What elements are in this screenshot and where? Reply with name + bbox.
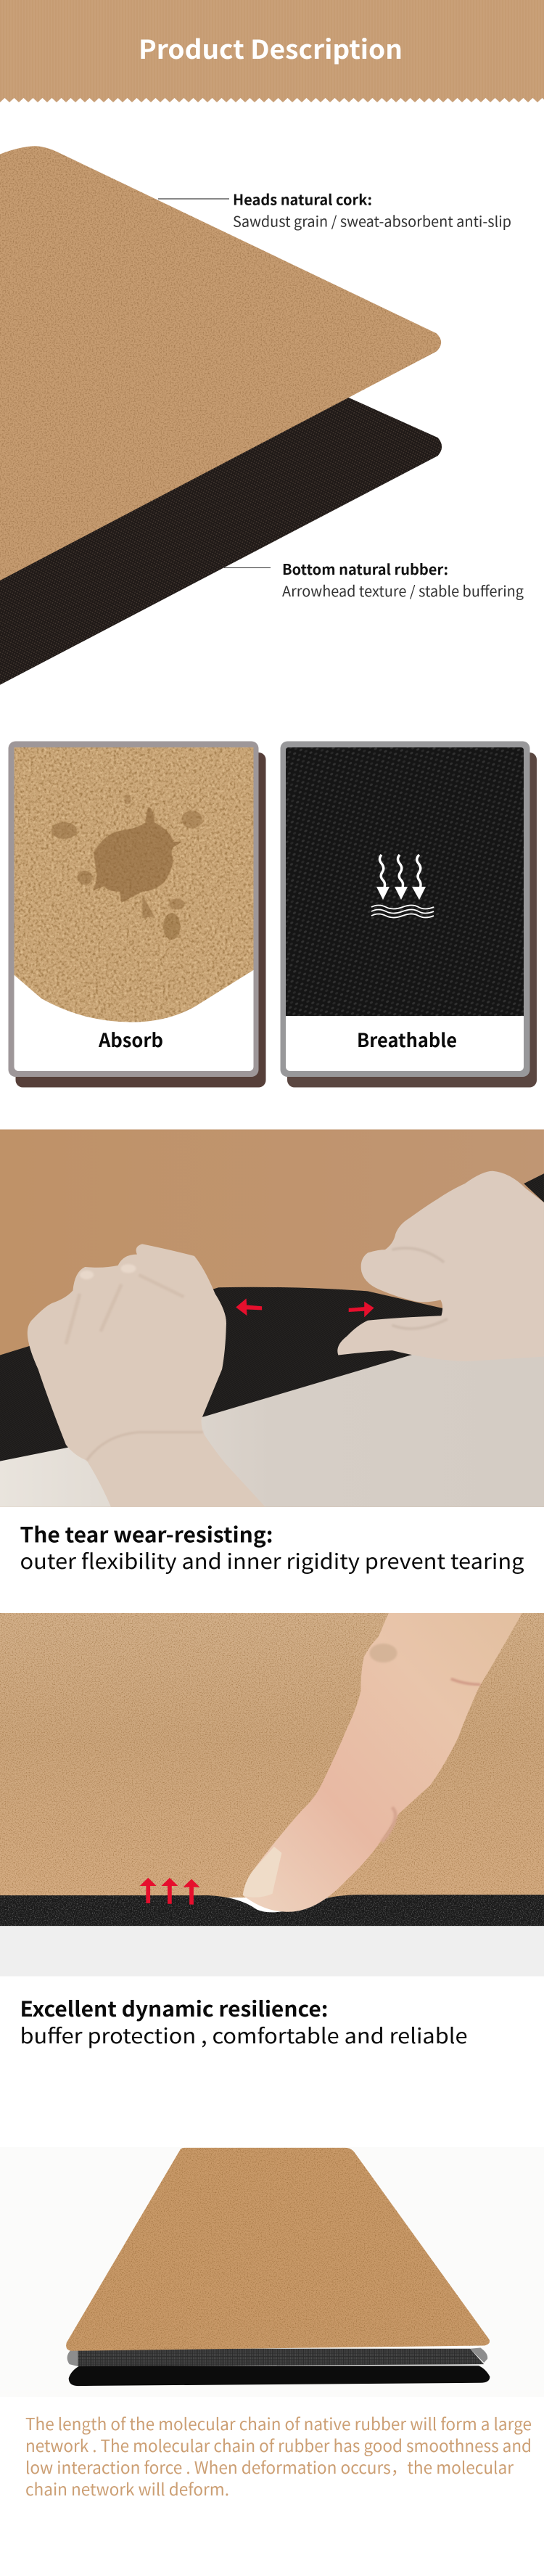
black mat band	[0, 1173, 544, 1461]
table band	[0, 1925, 544, 1977]
black foam edge	[0, 1895, 544, 1926]
icon: heat arrows over waves	[371, 855, 434, 917]
cork top layer	[0, 146, 441, 581]
text block: tear resistance	[20, 1518, 524, 1575]
black bottom layer	[69, 2366, 490, 2386]
finger	[243, 1613, 522, 1912]
text block: molecular chain description: network . The molecular chain of rubber has good smoothness and	[25, 2432, 532, 2457]
callout: bottom natural rubber: Arrowhead texture / stable buffering	[282, 580, 524, 601]
callout: heads natural cork: Sawdust grain / sweat-absorbent anti-slip	[233, 210, 511, 231]
panel: tear resistance photo	[0, 1129, 544, 1507]
label: breathable: Breathable	[357, 1026, 457, 1053]
title: Product Description	[139, 29, 403, 67]
header banner	[0, 0, 544, 102]
black rubber swatch	[286, 747, 524, 1016]
grey side translucent layer	[67, 2348, 487, 2366]
text block: dynamic resilience	[20, 1993, 467, 2050]
arrows: stretch direction	[236, 1298, 374, 1317]
text block: dynamic resilience: buffer protection , comfortable and reliable	[20, 2019, 467, 2050]
callout: bottom natural rubber	[224, 558, 524, 601]
callout: heads natural cork: Heads natural cork:	[233, 189, 372, 209]
layered mat illustration	[0, 146, 442, 685]
table surface	[0, 1352, 544, 1507]
text block: molecular chain description: The length of the molecular chain of native rubber will form a large	[25, 2411, 532, 2435]
text block: tear resistance: The tear wear-resisting:	[20, 1518, 273, 1549]
panel: dynamic resilience photo	[0, 1613, 544, 1977]
panel: breathable card	[280, 742, 537, 1087]
text block: molecular chain description: chain network will deform.	[25, 2476, 229, 2501]
panel: absorb card	[9, 742, 265, 1087]
text block: molecular chain description: low interaction force . When deformation occurs，the molecular	[25, 2454, 514, 2479]
right hand	[337, 1171, 544, 1361]
dotted middle layer	[78, 2349, 484, 2366]
left hand	[28, 1244, 265, 1507]
label: absorb: Absorb	[98, 1026, 163, 1053]
text block: molecular chain description	[25, 2411, 532, 2501]
rubber bottom layer	[0, 397, 442, 685]
text block: dynamic resilience: Excellent dynamic resilience:	[20, 1993, 328, 2023]
callout: heads natural cork	[158, 189, 511, 231]
cork surface	[0, 1613, 544, 1898]
cork top layer	[66, 2148, 490, 2351]
cork background	[0, 1129, 544, 1507]
panel: full mat photo	[0, 2147, 544, 2397]
text block: tear resistance: outer flexibility and inner rigidity prevent tearing	[20, 1545, 524, 1575]
callout: bottom natural rubber: Bottom natural rubber:	[282, 558, 448, 579]
arrows: rebound direction	[140, 1878, 200, 1905]
cork swatch with stain	[15, 747, 254, 1022]
